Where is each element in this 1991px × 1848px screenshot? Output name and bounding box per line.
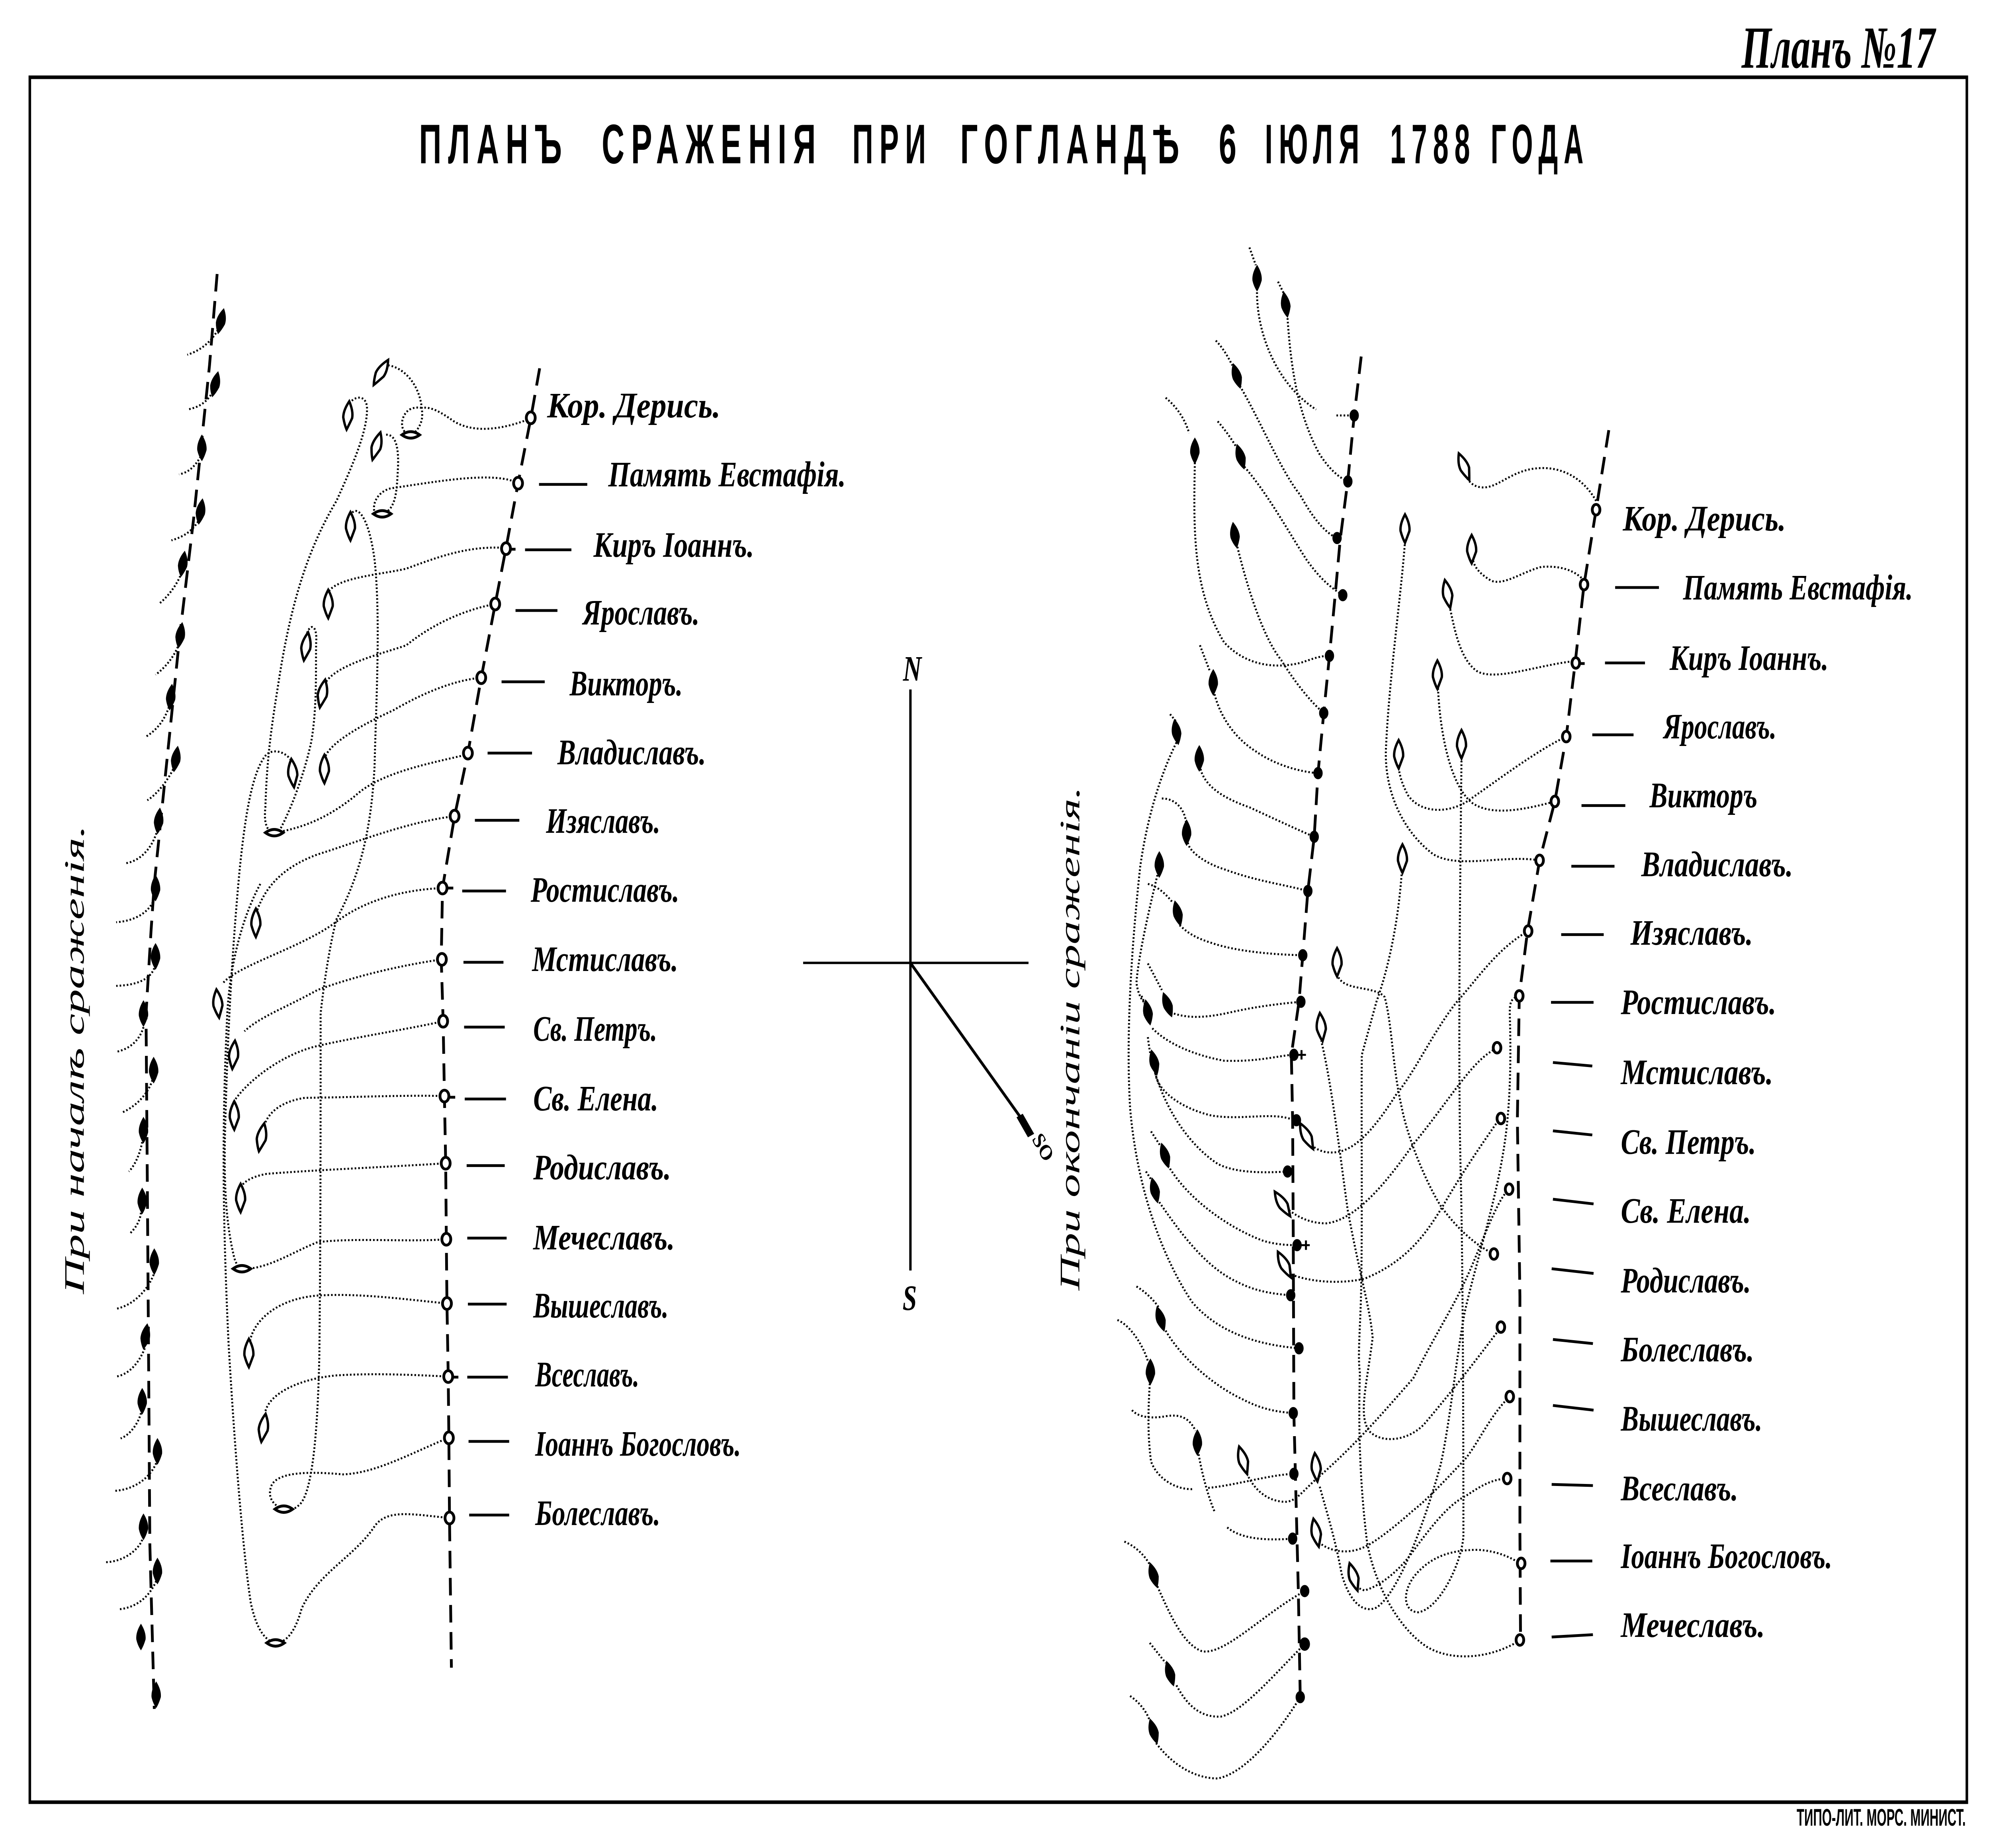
left diagram: enemy line at start of battle — [106, 274, 228, 1709]
title: ПРИ — [852, 113, 932, 175]
ship names: left diagram: Владиславъ. — [557, 732, 706, 772]
label: SO direction: SO — [1029, 1127, 1057, 1167]
ship names: right diagram: Викторъ — [1649, 775, 1758, 815]
ship names: right diagram: Ростиславъ. — [1620, 982, 1776, 1022]
ship names: right diagram: Ярославъ. — [1662, 706, 1776, 746]
title: ПЛАНЪ — [419, 113, 569, 175]
right diagram: Russian fleet tracks — [1235, 452, 1596, 1656]
title: СРАЖЕНІЯ — [602, 113, 822, 175]
ship names: right diagram: Изяславъ. — [1630, 912, 1753, 953]
ship names: left diagram: Кор. Дерись. — [547, 385, 720, 425]
ship names: right diagram: Родиславъ. — [1620, 1260, 1751, 1300]
ship names: left diagram: Киръ Іоаннъ. — [593, 525, 754, 565]
ship names: left diagram: Мечеславъ. — [532, 1217, 675, 1257]
ship names: right diagram: Память Евстафія. — [1683, 567, 1913, 607]
ship names: right diagram: Мстиславъ. — [1620, 1052, 1773, 1092]
title — [419, 113, 1589, 175]
ship names: left diagram: Св. Петръ. — [533, 1008, 657, 1049]
ship names: left diagram: Мстиславъ. — [532, 939, 678, 979]
right diagram: enemy line at end of battle — [1117, 247, 1361, 1778]
ship names: left diagram — [530, 385, 846, 1533]
left diagram: Russian line with ship nodes — [438, 368, 587, 1668]
ship names: left diagram: Викторъ. — [569, 663, 683, 703]
ship names: left diagram: Вышеславъ. — [533, 1285, 669, 1325]
ship names: right diagram: Болеславъ. — [1620, 1329, 1754, 1369]
caption: start of battle: При началѣ сраженія. — [59, 825, 90, 1294]
compass rose — [803, 689, 1031, 1270]
ship names: left diagram: Память Евстафія. — [608, 454, 846, 494]
plan number: Планъ №17 — [1741, 15, 1936, 81]
ship names: right diagram: Всеславъ. — [1620, 1468, 1738, 1508]
label: north: N — [903, 648, 922, 689]
title: ІЮЛЯ — [1265, 113, 1365, 175]
title: ГОДА — [1491, 113, 1589, 175]
title: ГОГЛАНДѢ — [960, 113, 1186, 175]
ship names: right diagram: Іоаннъ Богословъ. — [1620, 1536, 1832, 1576]
ship names: left diagram: Родиславъ. — [533, 1147, 671, 1187]
ship names: left diagram: Іоаннъ Богословъ. — [535, 1423, 741, 1464]
title: 6 — [1219, 113, 1236, 175]
ship names: left diagram: Изяславъ. — [546, 801, 660, 841]
ship names: right diagram: Киръ Іоаннъ. — [1669, 638, 1829, 678]
left diagram: Russian fleet tracks — [212, 358, 531, 1646]
ship names: left diagram: Ярославъ. — [582, 592, 700, 632]
ship names: right diagram: Вышеславъ. — [1620, 1398, 1762, 1439]
ship names: right diagram: Владиславъ. — [1641, 844, 1793, 884]
label: south: S — [903, 1278, 917, 1318]
ship names: right diagram: Св. Петръ. — [1621, 1122, 1756, 1162]
caption: end of battle: При окончаніи сраженія. — [1054, 787, 1085, 1291]
ship names: left diagram: Всеславъ. — [535, 1354, 639, 1394]
right diagram: Russian line with ship nodes — [1490, 430, 1659, 1645]
title: 1788 — [1390, 113, 1476, 175]
ship names: left diagram: Болеславъ. — [535, 1493, 660, 1533]
ship names: right diagram: Св. Елена. — [1621, 1190, 1751, 1231]
ship names: right diagram — [1620, 498, 1913, 1645]
ship names: left diagram: Ростиславъ. — [530, 869, 679, 910]
ship names: right diagram: Мечеславъ. — [1620, 1605, 1765, 1645]
ship names: left diagram: Св. Елена. — [533, 1078, 658, 1118]
ship names: right diagram: Кор. Дерись. — [1622, 498, 1786, 538]
printer's mark: ТИПО-ЛИТ. МОРС. МИНИСТ. — [1797, 1805, 1966, 1831]
